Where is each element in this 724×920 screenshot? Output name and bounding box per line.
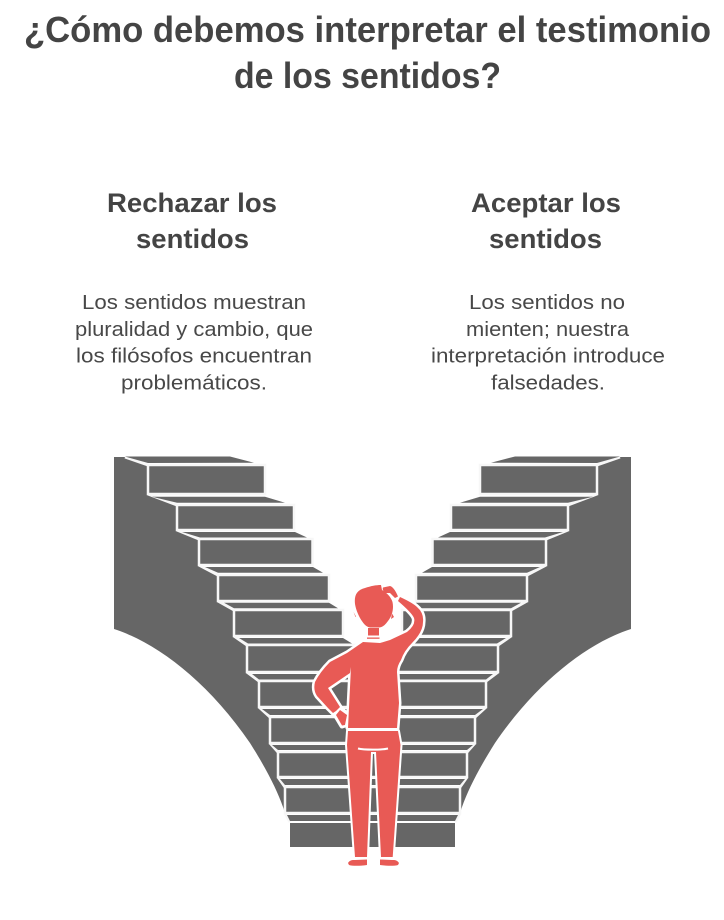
heading: rechazar los sentidos: Rechazar los: [107, 188, 277, 218]
hand on hip: [336, 710, 347, 726]
left step faces: [148, 465, 343, 636]
text block: aceptar: interpretación introduce: [431, 346, 665, 368]
heading: aceptar los sentidos: Aceptar los: [471, 188, 621, 218]
central lower step faces: [247, 645, 498, 813]
text block: rechazar: pluralidad y cambio, que: [75, 319, 313, 341]
right side wall: [460, 457, 631, 813]
legs: [347, 731, 400, 857]
text block: aceptar: falsedades.: [491, 372, 605, 394]
text block: aceptar: [431, 292, 665, 394]
text block: aceptar: mienten; nuestra: [466, 319, 630, 341]
heading: aceptar los sentidos: sentidos: [489, 224, 602, 254]
heading: rechazar los sentidos: [107, 188, 277, 254]
figure white outline: [314, 597, 423, 857]
figure: person with hand on head: [314, 585, 423, 866]
hand on head: [383, 586, 398, 598]
left step edges: [125, 457, 290, 822]
right step edges: [455, 457, 620, 822]
right treads: [393, 456, 620, 644]
text block: rechazar: problemáticos.: [121, 372, 267, 394]
heading: aceptar los sentidos: [471, 188, 621, 254]
right foot: [380, 860, 399, 866]
pocket line: [358, 748, 388, 750]
diverging staircase: [114, 456, 631, 847]
base step: [290, 823, 455, 847]
title: ¿Cómo debemos interpretar el testimonio: [24, 9, 711, 50]
right step faces: [402, 465, 597, 636]
neck: [368, 628, 379, 636]
right staircase flight: [393, 456, 631, 822]
left foot: [348, 860, 367, 866]
title: [24, 9, 711, 96]
text block: rechazar: los filósofos encuentran: [76, 346, 312, 368]
title: de los sentidos?: [234, 55, 501, 96]
left treads: [125, 456, 352, 644]
text block: aceptar: Los sentidos no: [469, 292, 625, 314]
torso and arms: [314, 597, 423, 728]
text block: rechazar: [75, 292, 313, 394]
text block: rechazar: Los sentidos muestran: [82, 292, 306, 314]
heading: rechazar los sentidos: sentidos: [136, 224, 249, 254]
ears: [354, 612, 394, 619]
collar: [367, 638, 380, 639]
left side wall: [114, 457, 285, 813]
left staircase flight: [114, 456, 352, 822]
head: [355, 585, 393, 628]
central lower treads: [252, 674, 493, 821]
